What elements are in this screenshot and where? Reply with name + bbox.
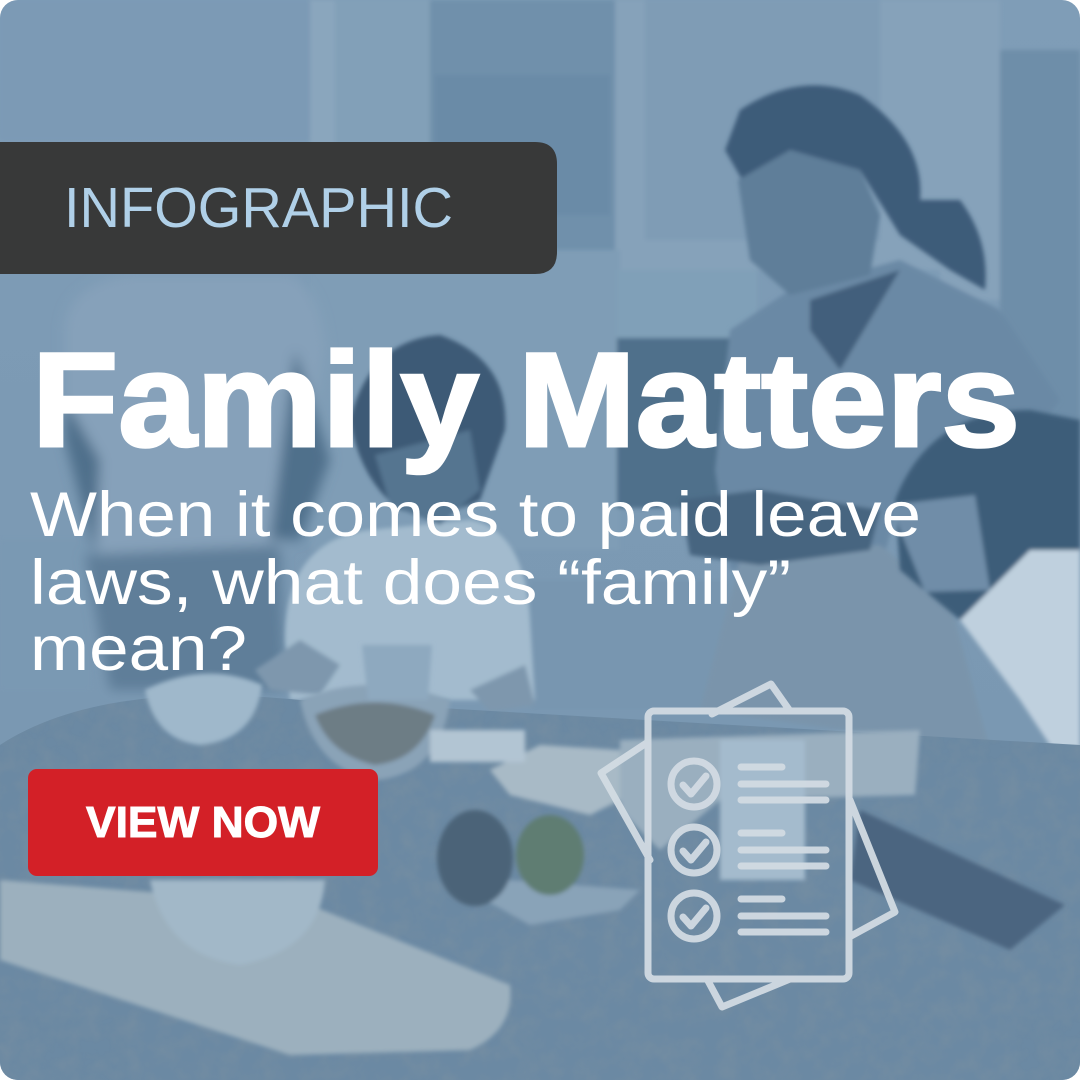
boy xyxy=(255,335,535,712)
man in pink shirt xyxy=(65,275,330,690)
subtitle: mean? xyxy=(30,614,247,684)
badge: infographic label: INFOGRAPHIC xyxy=(64,176,453,240)
counter xyxy=(0,645,1080,1080)
girl xyxy=(890,410,1080,790)
title: Family Matters xyxy=(32,326,1020,475)
subtitle: laws, what does “family” xyxy=(30,548,791,618)
woman xyxy=(680,85,1060,750)
button: view now: VIEW NOW xyxy=(86,798,320,847)
subtitle: When it comes to paid leave xyxy=(30,480,921,550)
